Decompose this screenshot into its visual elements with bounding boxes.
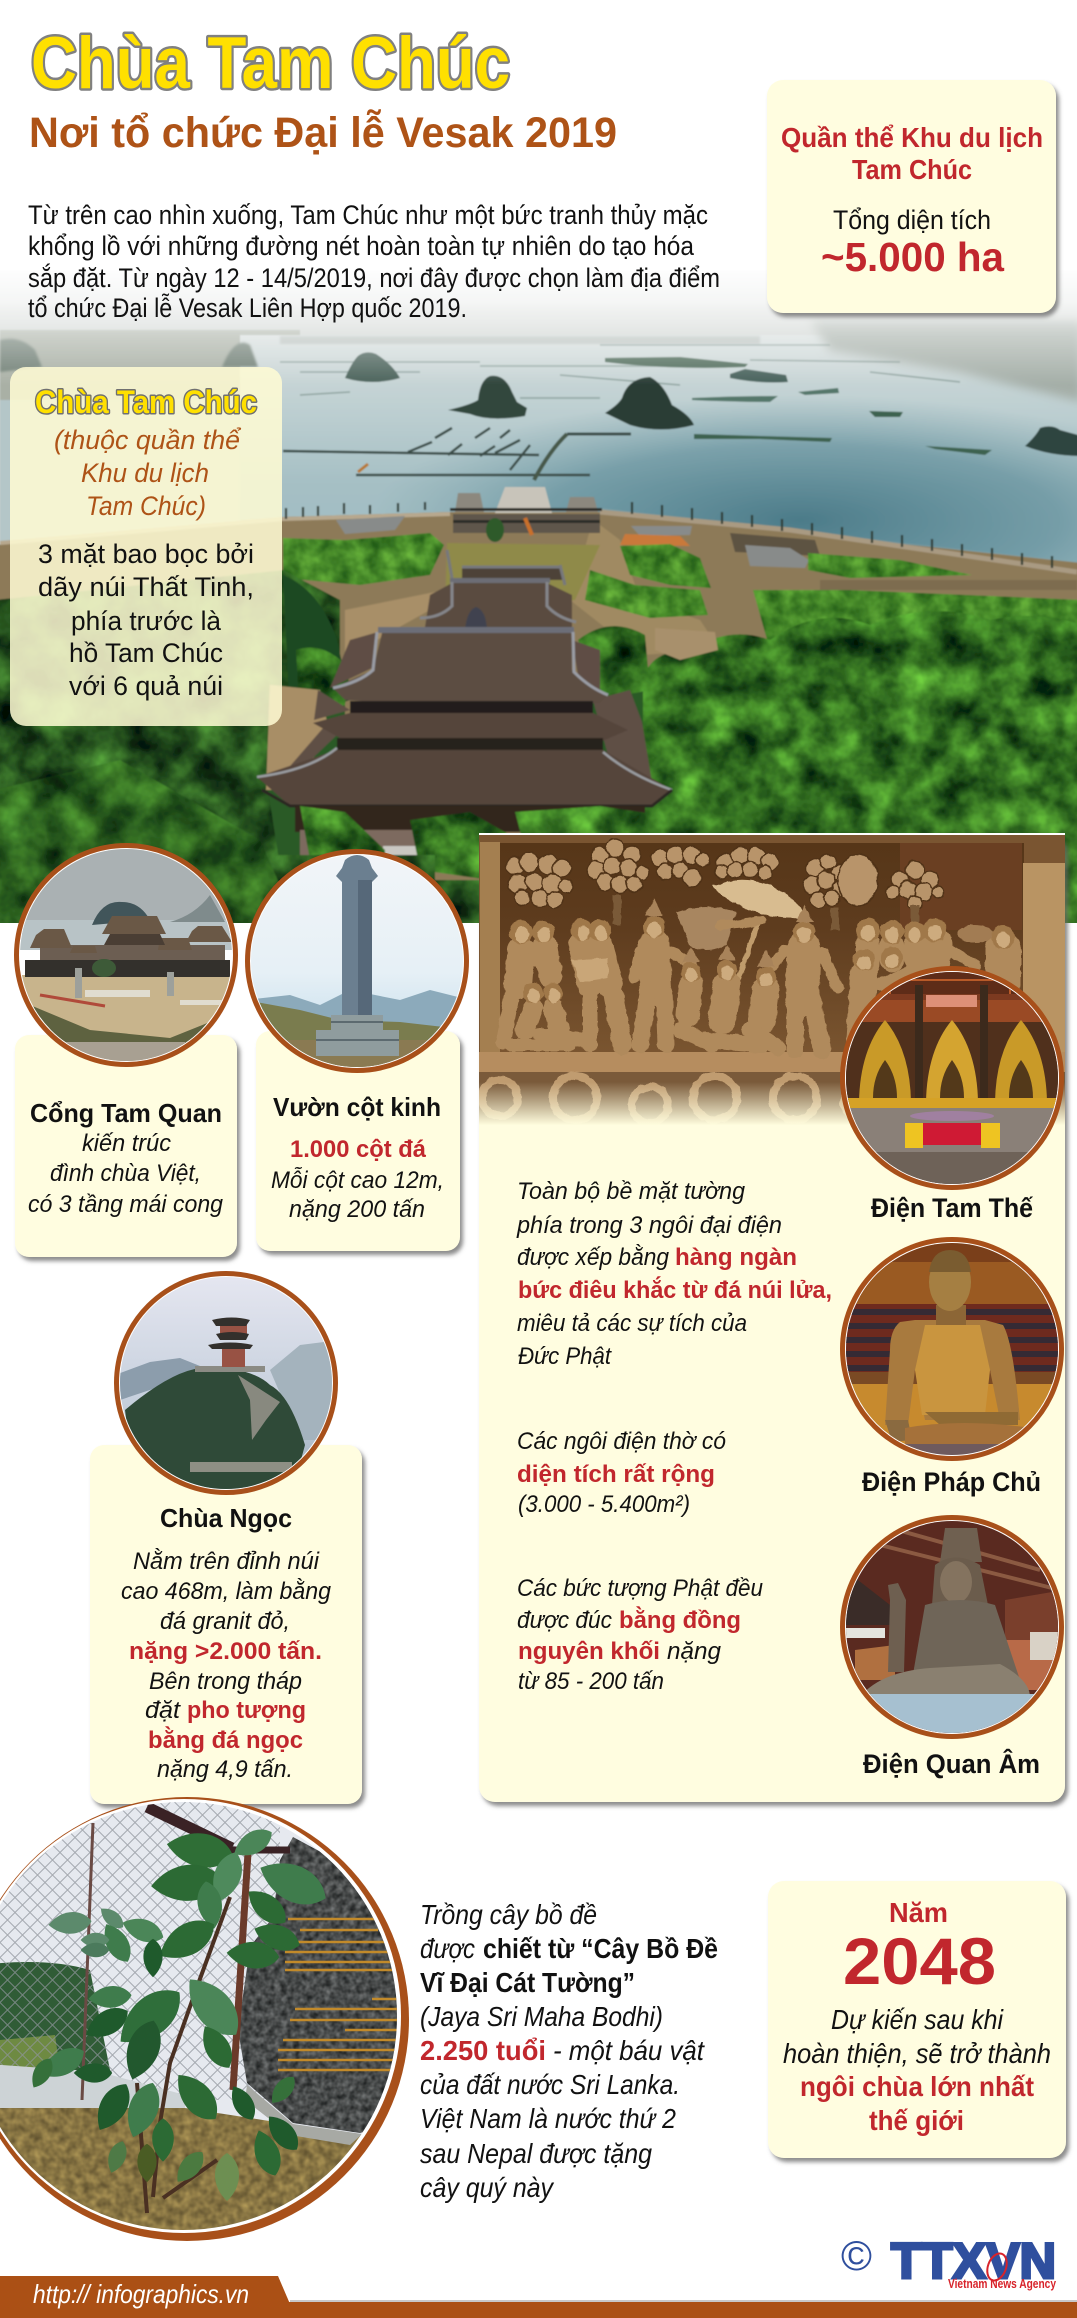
text: bodhi tree: của đất nước Sri Lanka. — [420, 2069, 680, 2100]
photo: land and road — [0, 511, 1077, 882]
photo circle: Dien Quan Am — [840, 1515, 1064, 1739]
panel: Vuon cot kinh card: nặng 200 tấn — [289, 1196, 425, 1223]
panel: Chua Ngoc card: nặng 4,9 tấn. — [157, 1756, 293, 1783]
panel: Cong Tam Quan card: có 3 tầng mái cong — [28, 1191, 224, 1218]
panel: year 2048: ngôi chùa lớn nhất — [800, 2071, 1034, 2102]
text: bronze statues: nguyên khối — [518, 1638, 660, 1665]
text: reliefs — [516, 1178, 832, 1370]
temple fourth roof — [313, 713, 628, 744]
panel: Cong Tam Quan card: Cổng Tam Quan — [30, 1098, 222, 1128]
text: bodhi tree: chiết từ “Cây Bồ Đề — [483, 1933, 718, 1964]
panel: year 2048: hoàn thiện, sẽ trở thành — [783, 2038, 1051, 2069]
panel: Chua Ngoc card: nặng >2.000 tấn. — [129, 1638, 322, 1665]
temple third roof — [333, 633, 608, 705]
panel: Chua Ngoc card: đặt — [145, 1697, 181, 1724]
panel: Cong Tam Quan card: đình chùa Việt, — [50, 1160, 201, 1187]
stone inscription lines — [278, 1919, 397, 2070]
relief trees — [506, 839, 944, 910]
panel: Chua Tam Chuc location: dãy núi Thất Tinh, — [38, 572, 254, 602]
relief heads — [509, 916, 1015, 1003]
photo circle: Dien Tam The — [840, 966, 1064, 1190]
intro text block: tổ chức Đại lễ Vesak Liên Hợp quốc 2019. — [28, 292, 467, 323]
intro text block — [28, 200, 720, 323]
footer bar — [0, 2276, 1077, 2318]
text: bodhi tree: (Jaya Sri Maha Bodhi) — [420, 2001, 663, 2032]
text: reliefs: phía trong 3 ngôi đại điện — [516, 1212, 782, 1239]
text: bronze statues: được đúc — [517, 1607, 612, 1634]
text: bodhi tree — [420, 1899, 718, 2203]
photo: left hazy land — [0, 330, 300, 400]
panel: total area: Tổng diện tích — [833, 205, 991, 235]
text: reliefs: Toàn bộ bề mặt tường — [517, 1178, 746, 1205]
text: floor area: diện tích rất rộng — [517, 1461, 715, 1488]
photo: right forest — [643, 611, 1077, 930]
panel: Chua Ngoc card: bằng đá ngọc — [148, 1726, 303, 1754]
plant stems — [137, 1897, 230, 2213]
photo: fish pens and causeway — [283, 428, 631, 480]
photo: distant far shore — [810, 320, 1077, 402]
text: reliefs: hàng ngàn — [675, 1244, 797, 1271]
panel: Chua Tam Chuc location: với 6 quả núi — [69, 671, 223, 701]
text: bodhi tree: Trồng cây bồ đề — [420, 1899, 597, 1930]
photo: karst islands — [345, 352, 1077, 456]
photo: green fields — [283, 533, 1077, 650]
panel: Chua Tam Chuc location: Tam Chúc) — [86, 491, 206, 521]
panel: total area: Tam Chúc — [852, 154, 972, 185]
logo: TTXVN: © — [841, 2232, 872, 2279]
photo circle: Vuon cot kinh — [245, 849, 470, 1075]
text: bodhi tree: được — [420, 1933, 475, 1964]
relief figures — [503, 945, 1003, 1050]
text: reliefs: được xếp bằng — [517, 1244, 670, 1271]
subtitle: Nơi tổ chức Đại lễ Vesak 2019 — [29, 108, 617, 157]
panel: relief and three halls — [479, 833, 1065, 1802]
text: bronze statues: Các bức tượng Phật đều — [517, 1575, 763, 1602]
temple front roof — [257, 750, 672, 806]
panel: Chua Ngoc card: đá granit đỏ, — [160, 1608, 290, 1635]
title: Chùa Tam Chúc — [31, 23, 510, 104]
panel: Vuon cot kinh card — [256, 1031, 460, 1251]
photo circle: Chua Ngoc — [113, 1271, 340, 1500]
panel: year 2048 — [768, 1881, 1066, 2158]
panel: year 2048: thế giới — [869, 2105, 964, 2136]
panel: Chua Tam Chuc location: hồ Tam Chúc — [69, 638, 223, 668]
label: Dien Phap Chu: Điện Pháp Chủ — [862, 1467, 1041, 1497]
text: bodhi tree: 2.250 tuổi — [420, 2035, 546, 2066]
panel: year 2048: 2048 — [843, 1924, 996, 1998]
panel: Cong Tam Quan card: kiến trúc — [82, 1130, 171, 1157]
panel: Chua Ngoc card: Chùa Ngọc — [160, 1503, 292, 1533]
text: bronze statues — [517, 1575, 763, 1695]
text: bronze statues: bằng đồng — [619, 1606, 741, 1634]
intro text block: sắp đặt. Từ ngày 12 - 14/5/2019, nơi đây được chọn làm địa điểm — [28, 262, 720, 293]
panel: Chua Tam Chuc location: Khu du lịch — [81, 458, 209, 488]
panel: Chua Tam Chuc location: Chùa Tam Chúc — [35, 384, 257, 420]
photo: lake reeds — [280, 345, 960, 398]
panel: total area: Quần thể Khu du lịch — [781, 122, 1043, 153]
text: reliefs: bức điêu khắc từ đá núi lửa, — [518, 1276, 832, 1304]
text: bronze statues: từ 85 - 200 tấn — [518, 1668, 664, 1695]
footer bar: http:// infographics.vn — [33, 2279, 249, 2309]
text: bronze statues: nặng — [667, 1638, 722, 1665]
label: Dien Quan Am: Điện Quan Âm — [863, 1748, 1040, 1779]
panel: Cong Tam Quan card — [15, 1035, 237, 1257]
photo: temple courtyard — [446, 543, 600, 600]
text: floor area: Các ngôi điện thờ có — [517, 1428, 726, 1455]
text: bodhi tree: Việt Nam là nước thứ 2 — [420, 2103, 676, 2134]
photo circle: Cong Tam Quan — [15, 845, 237, 1075]
photo: top mist fade — [0, 265, 1077, 385]
temple second roof — [425, 583, 572, 627]
photo: stone relief wall — [479, 833, 1065, 1125]
text: bodhi tree: sau Nepal được tặng — [420, 2138, 652, 2169]
text: floor area — [517, 1428, 726, 1518]
panel: Chua Ngoc card: pho tượng — [187, 1697, 306, 1724]
text: reliefs: Đức Phật — [518, 1343, 612, 1370]
photo: shoreline trees — [286, 502, 1052, 568]
panel: Chua Tam Chuc location: (thuộc quần thể — [54, 425, 242, 455]
panel: Chua Ngoc card: cao 468m, làm bằng — [121, 1578, 332, 1605]
text: bodhi tree: Vĩ Đại Cát Tường” — [420, 1967, 635, 1998]
panel: Chua Tam Chuc location — [10, 367, 282, 726]
logo: TTXVN: TTXVN — [891, 2233, 1056, 2289]
hero photo: aerial view of Tam Chuc pagoda and lake — [0, 265, 1077, 930]
photo: stone terrace and trees in front of temple — [299, 829, 416, 856]
photo: small gate temple — [450, 487, 602, 542]
panel: Vuon cot kinh card: 1.000 cột đá — [290, 1136, 427, 1163]
panel: year 2048: Dự kiến sau khi — [831, 2004, 1004, 2035]
text: bodhi tree: - một báu vật — [553, 2035, 705, 2066]
photo: main temple — [257, 550, 672, 832]
panel: total area — [767, 80, 1056, 313]
text: bodhi tree: cây quý này — [420, 2172, 555, 2203]
temple back roof — [462, 567, 562, 580]
photo: lake water — [240, 335, 1077, 563]
photo circle: Dien Phap Chu — [840, 1237, 1064, 1462]
relief scroll band — [482, 1076, 876, 1123]
label: Dien Tam The: Điện Tam Thế — [871, 1193, 1034, 1223]
text: floor area: (3.000 - 5.400m²) — [518, 1491, 690, 1518]
intro text block: Từ trên cao nhìn xuống, Tam Chúc như một bức tranh thủy mặc — [28, 200, 708, 230]
panel: year 2048: Năm — [889, 1897, 948, 1928]
panel: Chua Ngoc card — [90, 1445, 362, 1804]
bodhi leaves — [26, 1823, 333, 2201]
panel: Vuon cot kinh card: Vườn cột kinh — [273, 1092, 441, 1122]
panel: Vuon cot kinh card: Mỗi cột cao 12m, — [271, 1166, 444, 1194]
temple wings — [594, 690, 652, 778]
panel: Chua Tam Chuc location: phía trước là — [71, 606, 222, 636]
intro text block: khổng lồ với những đường nét hoàn toàn tự nhiên do tạo hóa — [28, 231, 695, 261]
relief umbrella and lotus bowl — [713, 880, 807, 918]
panel: Chua Tam Chuc location: 3 mặt bao bọc bởi — [38, 539, 254, 569]
panel: total area: ~5.000 ha — [821, 234, 1005, 280]
photo: left forest — [0, 570, 340, 930]
panel: Chua Ngoc card: Bên trong tháp — [149, 1668, 302, 1695]
panel: Chua Ngoc card: Nằm trên đỉnh núi — [133, 1548, 320, 1575]
photo circle: bodhi tree — [0, 1797, 420, 2250]
text: reliefs: miêu tả các sự tích của — [517, 1310, 747, 1337]
